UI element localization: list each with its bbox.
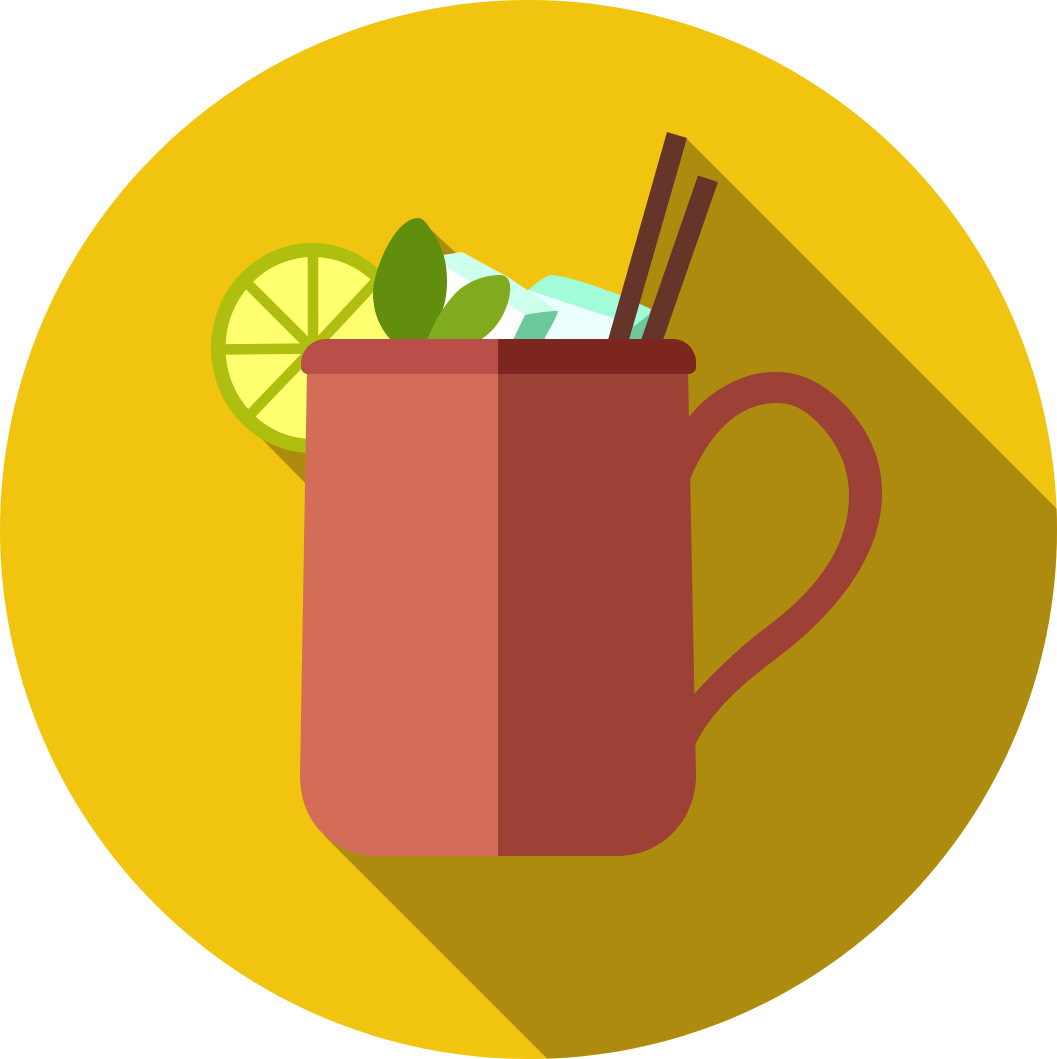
mug rim bbox=[301, 339, 696, 374]
mug handle bbox=[684, 372, 882, 750]
rim left bbox=[301, 339, 498, 374]
rim right bbox=[498, 339, 696, 374]
straw 1 bbox=[608, 132, 687, 340]
long shadow bbox=[257, 139, 1057, 1059]
straw 2 bbox=[641, 176, 718, 340]
lime slice bbox=[211, 243, 413, 453]
mug left face bbox=[300, 370, 498, 856]
dark mint leaf bbox=[373, 218, 447, 340]
light mint leaf bbox=[427, 275, 510, 340]
mug body bbox=[300, 370, 696, 856]
mug right face bbox=[498, 370, 696, 856]
back ice cube bbox=[528, 275, 651, 340]
front ice cube bbox=[430, 252, 558, 340]
ice cubes bbox=[430, 252, 651, 340]
